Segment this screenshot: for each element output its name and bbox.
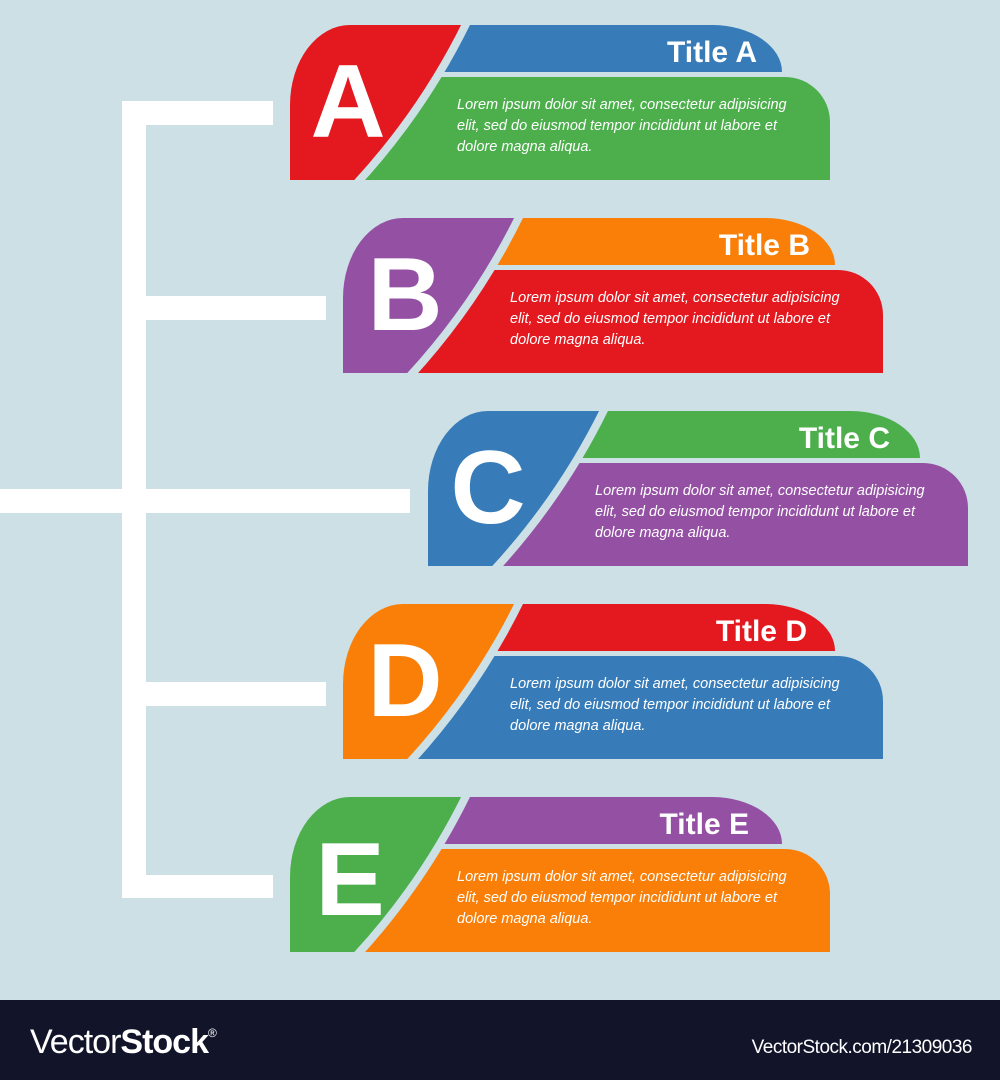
card D: Lorem ipsum dolor sit amet, consectetur adipisicing: [510, 676, 840, 692]
card E: Title E: [660, 808, 749, 841]
card B: B: [367, 237, 443, 353]
card C: Title C: [799, 422, 890, 455]
card B: dolore magna aliqua.: [510, 332, 645, 348]
card E: dolore magna aliqua.: [457, 911, 592, 927]
card D: dolore magna aliqua.: [510, 718, 645, 734]
card A: [290, 22, 830, 183]
card E: E: [315, 822, 385, 938]
card A: elit, sed do eiusmod tempor incididunt ut labore et: [457, 118, 778, 134]
card D: Title D: [716, 615, 807, 648]
footer bar: ®: [208, 1026, 217, 1040]
card D: [343, 601, 883, 762]
card C: Lorem ipsum dolor sit amet, consectetur adipisicing: [595, 483, 925, 499]
card E: elit, sed do eiusmod tempor incididunt ut labore et: [457, 890, 778, 906]
card A: A: [310, 44, 386, 160]
card A: dolore magna aliqua.: [457, 139, 592, 155]
card B: elit, sed do eiusmod tempor incididunt ut labore et: [510, 311, 831, 327]
card C: elit, sed do eiusmod tempor incididunt ut labore et: [595, 504, 916, 520]
card A: Lorem ipsum dolor sit amet, consectetur adipisicing: [457, 97, 787, 113]
footer bar: VectorStock: [30, 1023, 208, 1061]
card D: elit, sed do eiusmod tempor incididunt ut labore et: [510, 697, 831, 713]
card B: Lorem ipsum dolor sit amet, consectetur adipisicing: [510, 290, 840, 306]
card E: [290, 794, 830, 955]
card A: Title A: [667, 36, 757, 69]
bracket connector: [0, 101, 410, 898]
card B: [343, 215, 883, 376]
footer bar: [0, 1000, 1000, 1080]
card C: C: [450, 430, 526, 546]
card C: [428, 408, 968, 569]
card D: D: [367, 623, 443, 739]
footer bar: VectorStock.com/21309036: [752, 1037, 972, 1058]
card E: Lorem ipsum dolor sit amet, consectetur adipisicing: [457, 869, 787, 885]
card C: dolore magna aliqua.: [595, 525, 730, 541]
card B: Title B: [719, 229, 810, 262]
